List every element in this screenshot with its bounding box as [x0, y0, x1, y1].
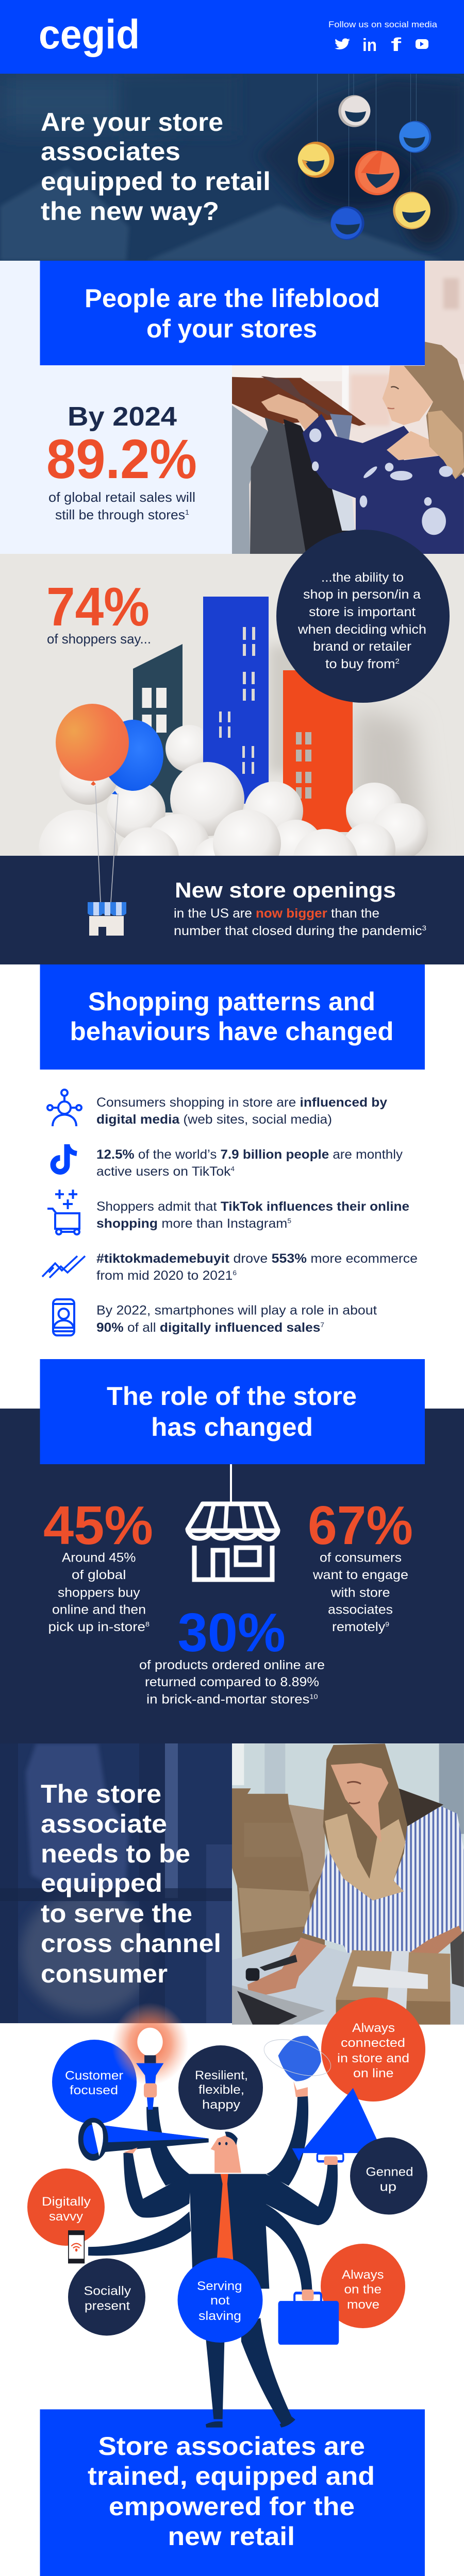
bubble: always on the move: Always: [342, 2268, 384, 2282]
text: tiktok influences shopping: 5: [287, 1217, 291, 1225]
social icons: in: [362, 36, 377, 55]
heading panel: The role of the store: [107, 1382, 357, 1411]
text: tiktokmademebuyit: #tiktokmademebuyit drove 553% more ecommerce: [96, 1251, 418, 1266]
photo: woman packing parcel at laptop: [232, 1743, 464, 2025]
building: dark: [133, 644, 183, 812]
callout circle: brand or retailer: [313, 639, 411, 654]
stat: 45%: 8: [145, 1620, 150, 1628]
bubble: resilient: happy: [202, 2098, 240, 2112]
arm holding megaphone: [265, 2163, 338, 2225]
bubble: socially present: Socially: [84, 2284, 131, 2298]
illustration: multi-armed store associate: [68, 2003, 377, 2428]
new store openings text: 3: [422, 924, 426, 932]
stat: 45%: 45%: [43, 1495, 153, 1556]
icon: store with hanging line: [188, 1464, 278, 1580]
text: tiktokmademebuyit: [96, 1251, 418, 1283]
text: tiktok influences shopping: [96, 1199, 409, 1231]
callout circle: shop in person/in a: [303, 587, 421, 602]
bubble: digitally savvy: [27, 2168, 105, 2246]
bubble: always on the move: move: [347, 2298, 379, 2312]
bubble: socially present: present: [85, 2299, 130, 2313]
stat: 67%: remotely: [332, 1620, 382, 1634]
section heading: store associates are trained: [40, 2409, 425, 2576]
stat: 30%: 10: [309, 1693, 318, 1700]
sphere behind blue building: [165, 725, 213, 772]
section heading: store associates are trained: empowered for the: [109, 2492, 355, 2521]
text: digital media influence: digital media (web sites, social media): [96, 1112, 332, 1127]
stat: 45%: shoppers buy: [58, 1586, 140, 1600]
building shadows: [353, 706, 428, 856]
icon: rising chart lines: [42, 1256, 85, 1278]
new store openings text: [174, 878, 426, 938]
torso: [189, 2174, 269, 2289]
bubble: socially present: [68, 2259, 145, 2336]
arm raising globe: [267, 2095, 308, 2186]
bubble: resilient: [178, 2045, 263, 2130]
white spheres: [39, 746, 428, 894]
briefcase: [294, 2293, 321, 2305]
text: tiktokmademebuyit: from mid 2020 to 2021: [96, 1268, 225, 1283]
text: smartphones role: 7: [320, 1321, 324, 1329]
building: orange: [283, 670, 353, 832]
bubble: always connected: connected: [341, 2036, 405, 2050]
heading panel: [40, 261, 425, 365]
arm holding briefcase: [265, 2204, 312, 2291]
stat: 67%: of consumers: [320, 1551, 402, 1565]
section: people are the lifeblood: [0, 261, 464, 554]
bubble: serving not slaving: [177, 2258, 263, 2343]
heading: store associate: consumer: [41, 1959, 168, 1988]
section heading: store associates are trained: new retail: [168, 2522, 295, 2551]
stat: 67%: 67%: [308, 1495, 413, 1556]
bubble: genned up: [350, 2137, 427, 2214]
head: [211, 2134, 241, 2173]
globe: [274, 2034, 321, 2081]
arm raising torch: [146, 2107, 191, 2186]
callout circle: to buy from: [325, 657, 390, 671]
stat: 67%: with store: [330, 1586, 390, 1600]
heading: store associate: associate: [41, 1809, 167, 1838]
new store openings text: in the US are now bigger than the: [174, 906, 379, 921]
icon: shopping cart: [47, 1190, 79, 1234]
stat: 45%: online and then: [52, 1602, 146, 1617]
hero title: associates: [41, 137, 180, 166]
follow us label: Follow us on social media: [328, 20, 438, 29]
arm holding telescope: [123, 2151, 191, 2218]
lamp glow: [111, 2003, 189, 2085]
smartphone: [68, 2230, 85, 2263]
heading panel: of your stores: [146, 314, 317, 343]
hero title: [41, 108, 271, 226]
stat: 45%: [43, 1495, 153, 1634]
social icons: [335, 34, 428, 55]
hero title: Are your store: [41, 108, 223, 137]
hero banner: [0, 74, 464, 261]
torch and bulb: [136, 2063, 163, 2110]
stat: 30%: 30%: [177, 1602, 286, 1663]
stat: 89.2%: 89.2%: [46, 428, 197, 490]
bubble: resilient: Resilient,: [195, 2069, 248, 2082]
bubble: always on the move: on the: [344, 2282, 382, 2297]
hero title: the new way?: [41, 197, 219, 226]
heading panel: People are the lifeblood: [85, 284, 380, 313]
shoes: [206, 2416, 295, 2428]
bubble: always connected: [321, 1997, 425, 2102]
stat: 67%: want to engage: [312, 1568, 408, 1582]
heading: store associate: The store: [41, 1780, 161, 1808]
stat: 67%: [308, 1495, 413, 1634]
stat: 67%: associates: [328, 1602, 393, 1617]
callout circle: 2: [395, 657, 400, 665]
heading: store associate: needs to be: [41, 1839, 190, 1868]
photo: dark tinted clothing rack: [0, 1743, 232, 2023]
text: smartphones role: By 2022, smartphones will play a role in about: [96, 1303, 377, 1318]
section heading: store associates are trained: Store associates are: [98, 2432, 365, 2461]
bubble: genned up: up: [379, 2180, 396, 2194]
text: digital media influence: [96, 1095, 387, 1127]
hero title: equipped to retail: [41, 167, 271, 196]
stat: 30%: in brick-and-mortar stores: [146, 1692, 293, 1706]
bubble: always connected: Always: [352, 2021, 395, 2035]
stat: 89.2%: of global retail sales will: [48, 489, 195, 505]
heading: store associate: equipped: [41, 1869, 162, 1897]
stat: 45%: of global: [72, 1568, 126, 1582]
icon: balloon strings: [95, 786, 118, 902]
stat: 74%: 74%: [46, 577, 150, 637]
stat: 89.2%: still be through stores: [55, 507, 183, 522]
band: new store openings: [0, 786, 464, 964]
text: tiktok users: [96, 1147, 403, 1179]
callout circle: [276, 530, 450, 703]
bubble: customer focused: Customer: [65, 2069, 123, 2082]
bubble: serving not slaving: slaving: [198, 2309, 241, 2323]
balloon: orange: [56, 704, 129, 786]
heading: store associate: [41, 1780, 221, 1988]
telescope: [102, 2126, 209, 2153]
bubble: serving not slaving: Serving: [197, 2279, 242, 2293]
megaphone: [301, 2088, 377, 2153]
section: shopping patterns heading: Shopping patterns and: [88, 987, 375, 1016]
icon: small store: [88, 902, 126, 936]
bubble: customer focused: [52, 2040, 137, 2124]
stat: 89.2%: 1: [185, 508, 189, 516]
section: shopping patterns heading: behaviours have changed: [70, 1017, 394, 1046]
bubble: resilient: flexible,: [198, 2083, 244, 2097]
photo: woman browsing clothes rack: [232, 261, 464, 554]
text: tiktok users: 4: [230, 1165, 235, 1173]
legs: [204, 2318, 291, 2424]
social icons: f: [391, 34, 402, 55]
header band: [0, 0, 464, 74]
heading panel: [40, 1359, 425, 1464]
icon: network person: [47, 1090, 81, 1126]
new store openings text: number that closed during the pandemic: [174, 924, 404, 938]
text: smartphones role: [96, 1303, 377, 1335]
section: role of the store: [0, 1359, 464, 1743]
balloon: blue: [103, 720, 163, 794]
text: tiktok users: 12.5% of the world’s 7.9 billion people are monthly: [96, 1147, 403, 1162]
text: tiktok influences shopping: Shoppers admit that TikTok influences their online: [96, 1199, 409, 1214]
callout circle: store is important: [309, 605, 416, 619]
stat: 67%: 9: [385, 1620, 389, 1628]
text: digital media influence: Consumers shopping in store are influenced by: [96, 1095, 387, 1110]
stat: 89.2%: By 2024: [68, 402, 177, 432]
stat: 89.2%: [46, 402, 197, 522]
text: smartphones role: 90% of all digitally influenced sales: [96, 1320, 312, 1335]
section: shopping patterns heading: [40, 964, 425, 1070]
text: tiktok users: active users on TikTok: [96, 1164, 223, 1179]
stat: 30%: [139, 1602, 325, 1706]
necktie: [217, 2174, 233, 2260]
bubble: always on the move: [321, 2244, 405, 2328]
stat: 45%: Around 45%: [62, 1551, 136, 1565]
bubble: serving not slaving: not: [210, 2294, 230, 2308]
callout circle: when deciding which: [297, 622, 426, 637]
stat: 45%: pick up in-store: [48, 1620, 136, 1634]
section: 74% of shoppers scene: [0, 530, 464, 894]
arm holding phone: [88, 2211, 191, 2256]
section heading: store associates are trained: trained, equipped and: [88, 2462, 375, 2490]
bubble: digitally savvy: savvy: [49, 2210, 83, 2224]
callout circle: ...the ability to: [321, 570, 404, 585]
icon: tiktok: [53, 1144, 77, 1172]
bubble: customer focused: focused: [70, 2083, 118, 2097]
building: blue: [203, 597, 269, 804]
bubble: always connected: in store and: [337, 2052, 409, 2065]
icon: smartphone: [53, 1299, 74, 1335]
stat: 30%: of products ordered online are: [139, 1658, 325, 1672]
bubble: digitally savvy: Digitally: [42, 2195, 91, 2209]
icon: hanging smileys: [298, 74, 431, 240]
cegid logo: cegid: [39, 11, 140, 57]
section: store associate needs to be equipped: [0, 1743, 464, 2025]
new store openings text: New store openings: [175, 878, 396, 902]
bubble: genned up: Genned: [366, 2165, 413, 2179]
text: tiktokmademebuyit: 6: [233, 1269, 237, 1277]
stat: 30%: returned compared to 8.89%: [145, 1675, 319, 1689]
stat: 74%: of shoppers say...: [47, 631, 151, 647]
bubble: always connected: on line: [353, 2066, 394, 2080]
heading: store associate: to serve the: [41, 1899, 192, 1928]
heading panel: has changed: [151, 1413, 313, 1442]
text: tiktok influences shopping: shopping more than Instagram: [96, 1216, 280, 1231]
heading: store associate: cross channel: [41, 1929, 221, 1958]
